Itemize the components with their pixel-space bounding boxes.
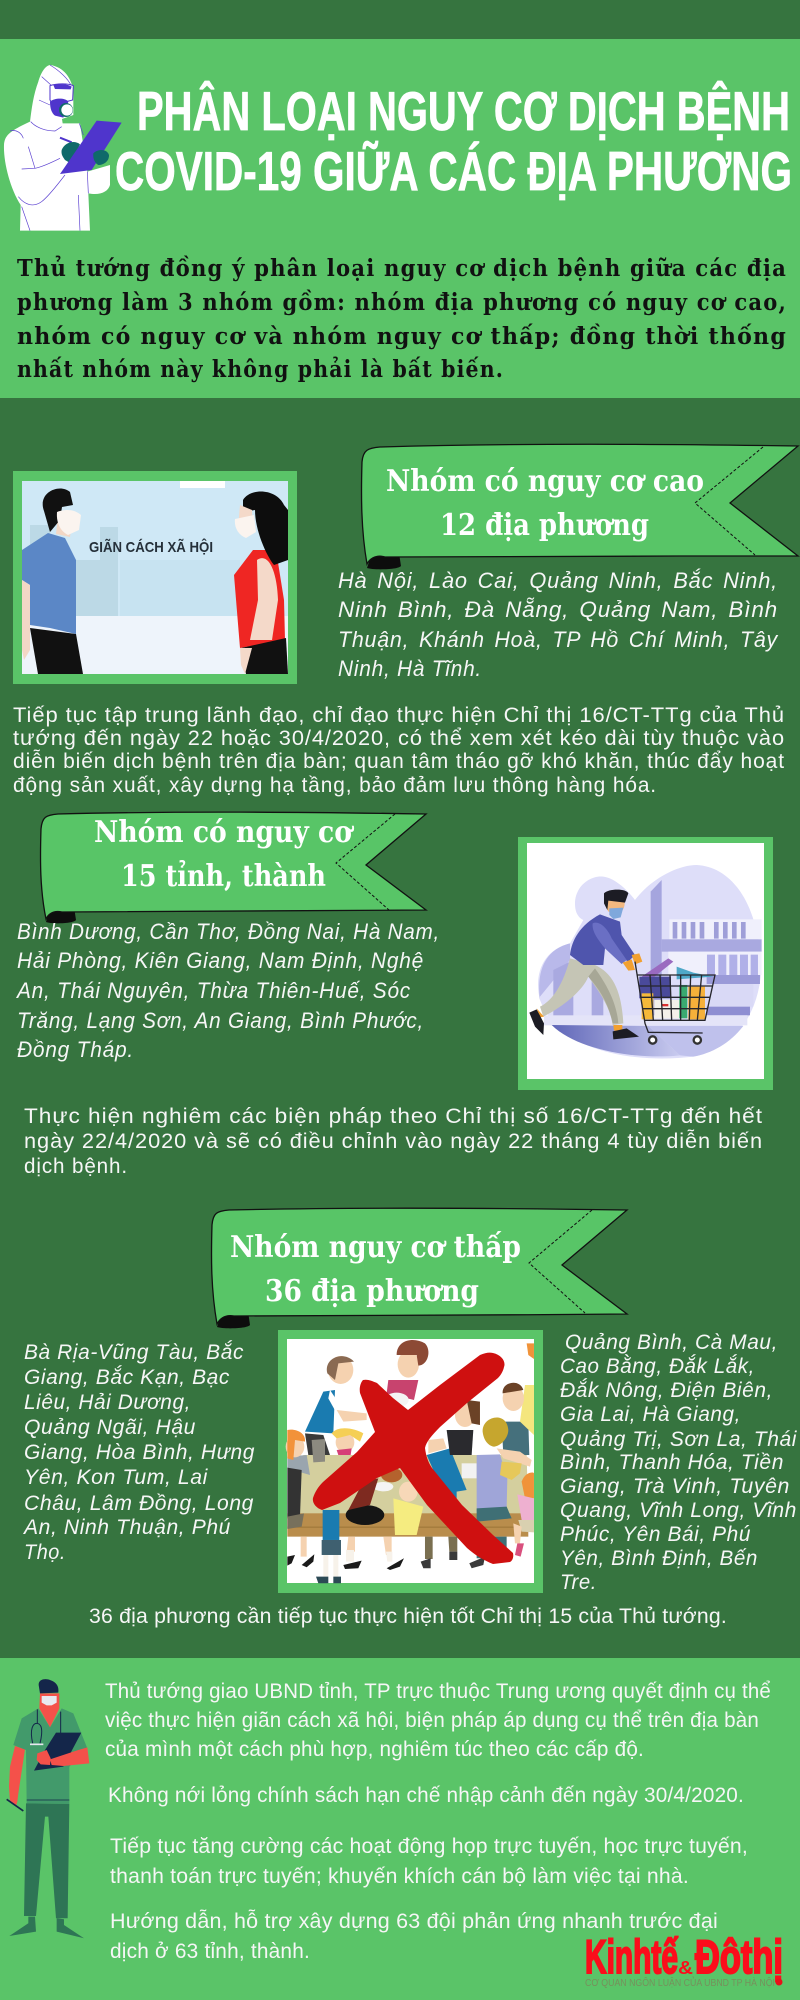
text: final measures [105, 1680, 771, 1963]
text: at-risk directive: dịch bệnh. [24, 1155, 128, 1178]
logo: Kinh tế & Đô thị: & [678, 1958, 693, 1978]
list: low-risk localities, right: Quang, Vĩnh Long, Vĩnh [560, 1499, 797, 1522]
man with mask [22, 488, 83, 674]
image caption: GIÃN CÁCH XÃ HỘI [89, 538, 213, 556]
logo: Kinh tế & Đô thị [585, 1930, 783, 1989]
text: at-risk directive [24, 1105, 763, 1178]
table and bench [287, 1455, 528, 1537]
panel: footer [0, 1658, 800, 2000]
text: at-risk directive: Thực hiện nghiêm các biện pháp theo Chỉ thị số 16/CT-TTg đến hết [24, 1105, 763, 1128]
text: final measures: Thủ tướng giao UBND tỉnh, TP trực thuộc Trung ương quyết định cụ thể [105, 1680, 771, 1703]
list: low-risk localities, right: Tre. [560, 1571, 597, 1594]
list: high-risk localities: Ninh Bình, Đà Nẵng, Quảng Nam, Bình [338, 597, 778, 622]
list: low-risk localities, left: Quảng Ngãi, Hậu [24, 1416, 196, 1439]
list: low-risk localities, right [560, 1331, 798, 1594]
text: high-risk directive: động sản xuất, xây dựng hạ tầng, bảo đảm lưu thông hàng hóa. [13, 774, 657, 797]
list: high-risk localities: Ninh, Hà Tĩnh. [338, 656, 482, 681]
banner: low-risk group: 36 địa phương [265, 1274, 479, 1309]
icon: red cross [313, 1353, 513, 1564]
text: final measures: thanh toán trực tuyến; khuyến khích cán bộ làm việc tại nhà. [110, 1865, 689, 1888]
text: at-risk directive: ngày 22/4/2020 và sẽ có điều chỉnh vào ngày 22 tháng 4 tùy diễn biến [24, 1130, 763, 1153]
shopper [529, 890, 642, 1039]
intro text: nhất nhóm này không phải là bất biến. [17, 356, 504, 383]
text: high-risk directive: Tiếp tục tập trung lãnh đạo, chỉ đạo thực hiện Chỉ thị 16/CT-TTg của Thủ [13, 704, 785, 727]
list: at-risk localities [15, 919, 440, 1062]
icon: doctor in scrubs [7, 1679, 89, 1938]
image: social distancing illustration [13, 471, 297, 684]
list: at-risk localities: An, Thái Nguyên, Thừa Thiên-Huế, Sóc [15, 978, 411, 1003]
banner: high-risk group [362, 444, 798, 569]
intro text [17, 255, 787, 383]
banner: low-risk group: Nhóm nguy cơ thấp [230, 1230, 521, 1265]
list: low-risk localities, left: Bà Rịa-Vũng Tàu, Bắc [24, 1341, 244, 1364]
logo: Kinh tế & Đô thị: CƠ QUAN NGÔN LUẬN CỦA UBND TP HÀ NỘI [585, 1976, 775, 1989]
text: low-risk directive: 36 địa phương cần tiếp tục thực hiện tốt Chỉ thị 15 của Thủ tướng. [89, 1605, 727, 1628]
list: low-risk localities, left: Yên, Kon Tum, Lai [24, 1466, 209, 1489]
list: low-risk localities, right: Cao Bằng, Đắk Lắk, [560, 1355, 755, 1378]
text: final measures: Hướng dẫn, hỗ trợ xây dựng 63 đội phản ứng nhanh trước đại [110, 1910, 718, 1933]
list: low-risk localities, left: Giang, Hòa Bình, Hưng [24, 1441, 255, 1464]
list: high-risk localities: Thuận, Khánh Hoà, TP Hồ Chí Minh, Tây [338, 627, 779, 652]
banner: at-risk group [41, 812, 426, 923]
list: low-risk localities, left [22, 1341, 255, 1564]
list: at-risk localities: Đồng Tháp. [17, 1037, 134, 1062]
list: low-risk localities, right: Yên, Bình Định, Bến [560, 1547, 758, 1570]
list: low-risk localities, right: Giang, Trà Vinh, Tuyên [560, 1475, 790, 1498]
list: at-risk localities: Trăng, Lạng Sơn, An Giang, Bình Phước, [17, 1008, 424, 1033]
banner: high-risk group: Nhóm có nguy cơ cao [386, 464, 704, 499]
list: low-risk localities, left: Châu, Lâm Đồng, Long [24, 1492, 254, 1515]
image: shopper with cart [518, 837, 773, 1090]
list: low-risk localities, right: Gia Lai, Hà Giang, [560, 1403, 741, 1426]
text: final measures: của mình một cách phù hợp, nghiêm túc theo các cấp độ. [105, 1738, 644, 1761]
diners [286, 1340, 534, 1583]
title [115, 80, 792, 202]
list: high-risk localities: Hà Nội, Lào Cai, Quảng Ninh, Bắc Ninh, [338, 568, 778, 593]
list: low-risk localities, left: Giang, Bắc Kạn, Bạc [24, 1366, 230, 1389]
text: high-risk directive [13, 704, 785, 797]
list: high-risk localities [338, 568, 779, 681]
intro text: nhóm có nguy cơ và nhóm nguy cơ thấp; đồng thời thống [17, 323, 787, 350]
icon: person in protective suit [4, 65, 122, 231]
banner: at-risk group: 15 tỉnh, thành [121, 859, 326, 894]
list: low-risk localities, left: An, Ninh Thuận, Phú [22, 1516, 231, 1539]
panel: header [0, 39, 800, 398]
text: final measures: việc thực hiện giãn cách xã hội, biện pháp áp dụng cụ thể trên địa bàn [105, 1709, 759, 1732]
list: low-risk localities, left: Thọ. [24, 1541, 66, 1564]
list: at-risk localities: Hải Phòng, Kiên Giang, Nam Định, Nghệ [17, 948, 424, 973]
list: low-risk localities, right: Phúc, Yên Bái, Phú [560, 1523, 751, 1546]
image: crowded meal crossed out [278, 1330, 543, 1593]
woman with mask [234, 492, 288, 674]
banner: low-risk group [212, 1208, 627, 1328]
list: low-risk localities, left: Liêu, Hải Dương, [24, 1391, 191, 1414]
list: low-risk localities, right: Đắk Nông, Điện Biên, [560, 1379, 773, 1402]
banner: high-risk group: 12 địa phương [440, 508, 649, 543]
logo: Kinh tế & Đô thị: Kinhtế [585, 1930, 679, 1983]
text: final measures: Không nới lỏng chính sách hạn chế nhập cảnh đến ngày 30/4/2020. [108, 1784, 744, 1807]
list: low-risk localities, right: Quảng Bình, Cà Mau, [565, 1331, 778, 1354]
list: low-risk localities, right: Bình, Thanh Hóa, Tiền [560, 1451, 784, 1474]
shopping cart [635, 958, 715, 1044]
text: high-risk directive: tướng đến ngày 22 hoặc 30/4/2020, có thể xem xét kéo dài tùy thuộc vào [13, 727, 785, 750]
text: high-risk directive: diễn biến dịch bệnh trên địa bàn; quan tâm tháo gỡ khó khăn, thúc đẩy hoạt [13, 750, 785, 773]
text: final measures: Tiếp tục tăng cường các hoạt động họp trực tuyến, học trực tuyến, [110, 1835, 748, 1858]
text: final measures: dịch ở 63 tỉnh, thành. [110, 1940, 310, 1963]
list: at-risk localities: Bình Dương, Cần Thơ, Đồng Nai, Hà Nam, [17, 919, 440, 944]
list: low-risk localities, right: Quảng Trị, Sơn La, Thái [560, 1428, 798, 1451]
banner: at-risk group: Nhóm có nguy cơ [94, 815, 355, 850]
